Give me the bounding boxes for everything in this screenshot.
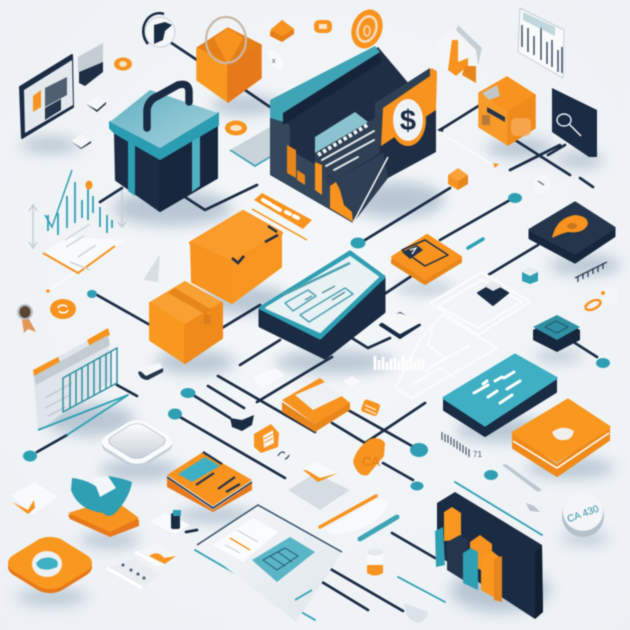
bar chart card top right xyxy=(518,8,564,78)
white arrow line xyxy=(437,126,499,168)
connector end dots xyxy=(23,193,610,490)
white chip xyxy=(252,368,285,388)
white card with orange mark xyxy=(11,482,58,515)
white tile with dark piece xyxy=(150,510,190,534)
orange C badge xyxy=(353,438,385,475)
dark button xyxy=(478,281,508,305)
gray shield xyxy=(404,603,428,623)
teal swoosh on orange stack xyxy=(68,476,139,537)
envelope card xyxy=(288,462,350,510)
orange diamond with frame xyxy=(392,235,461,284)
leaf icon xyxy=(268,50,283,70)
leaf icon: x xyxy=(272,58,276,65)
orange cube xyxy=(479,77,535,145)
L icon on hexagon xyxy=(437,25,482,83)
orange book xyxy=(167,452,252,512)
window panel with grid xyxy=(33,328,128,430)
tablet panel xyxy=(20,55,73,138)
dark rounded diamond with flame xyxy=(530,203,614,262)
white bar chart xyxy=(375,356,423,370)
teal briefcase box xyxy=(110,84,218,211)
small tag xyxy=(526,503,540,512)
teal card xyxy=(444,355,556,436)
document sheet xyxy=(315,112,368,155)
target icon xyxy=(346,5,388,53)
teal accent lines xyxy=(67,395,542,620)
teal small cube xyxy=(522,268,538,284)
barcode xyxy=(442,432,482,459)
orange round badge xyxy=(50,299,76,319)
small dark connector piece xyxy=(230,415,254,431)
glass circuit outline xyxy=(395,272,530,398)
teal dash xyxy=(468,239,483,248)
coin xyxy=(562,493,604,537)
bottle xyxy=(367,548,383,576)
egg icon xyxy=(533,175,551,195)
dollar panel: $ xyxy=(400,105,416,137)
central teal screen device xyxy=(260,252,384,358)
comb icon xyxy=(575,262,607,282)
barcode: 71 xyxy=(473,450,482,459)
soft shadows xyxy=(16,95,621,612)
white plate xyxy=(96,417,178,470)
small white card xyxy=(343,376,361,387)
orange icon tile xyxy=(1,532,99,598)
teal device upper right xyxy=(533,315,580,352)
gray sail xyxy=(143,254,160,282)
main envelope with charts and dollar panel xyxy=(270,46,437,223)
dark search panel xyxy=(552,88,597,157)
coin: CA 430 xyxy=(566,504,601,525)
keyboard panel xyxy=(315,118,380,180)
dark bar chart block xyxy=(435,492,543,619)
small orange cube xyxy=(448,168,468,190)
orange document icon xyxy=(254,424,279,453)
dollar panel xyxy=(375,68,437,147)
glass sheet xyxy=(230,127,270,166)
white leaf with orange stripe xyxy=(320,496,388,535)
small gray panel xyxy=(78,43,103,86)
orange chart bars xyxy=(287,145,353,222)
small white cards with orange xyxy=(107,543,180,588)
orange pill top xyxy=(314,20,332,33)
orange bar with dots xyxy=(252,193,312,240)
orange card xyxy=(513,400,609,476)
glass panel with documents xyxy=(197,505,342,622)
analysis line chart xyxy=(29,170,126,293)
teal pill xyxy=(360,517,397,539)
small icons upper left xyxy=(71,58,132,149)
dark button small xyxy=(138,363,163,380)
orange C badge: CA xyxy=(362,454,380,469)
orange document tag xyxy=(360,399,381,417)
orange tray with white top xyxy=(282,378,350,432)
globe icon xyxy=(143,13,175,47)
big orange box xyxy=(191,212,281,303)
medal icon xyxy=(17,304,36,333)
orange box with ring handle xyxy=(197,17,261,102)
squiggle xyxy=(278,452,289,459)
envelope teal band xyxy=(270,46,380,122)
orange pill xyxy=(225,120,247,136)
orange ring and white blob xyxy=(584,287,618,312)
small orange box xyxy=(150,282,222,363)
white button xyxy=(380,313,420,338)
gray bar xyxy=(502,464,542,492)
small orange stack xyxy=(270,20,294,42)
